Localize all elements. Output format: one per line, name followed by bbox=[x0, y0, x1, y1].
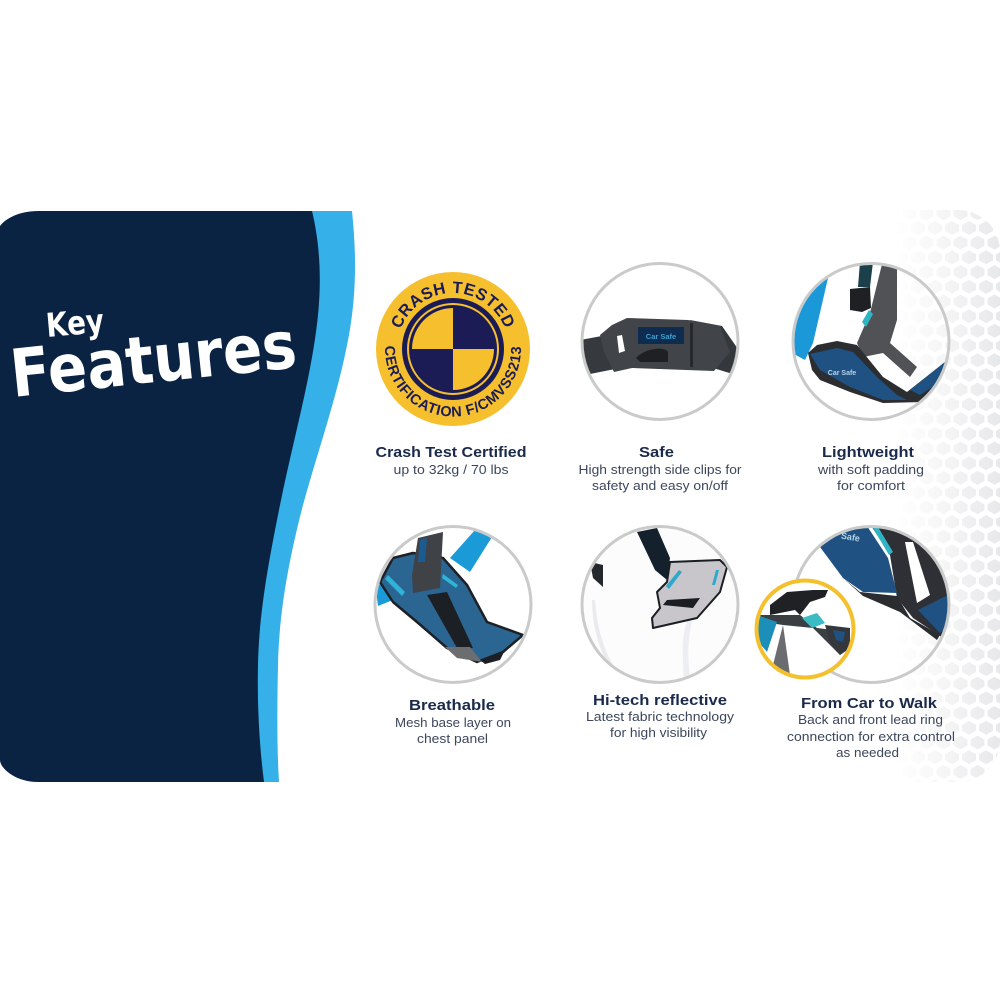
photo: harness padding: Car Safe bbox=[828, 370, 856, 377]
icon: crash tested badge bbox=[376, 272, 530, 426]
heading: Lightweight bbox=[822, 444, 914, 461]
title word: Key: Key bbox=[44, 301, 105, 345]
heading: Safe bbox=[639, 444, 674, 461]
description line 2: chest panel bbox=[417, 731, 488, 746]
photo: mesh chest panel bbox=[375, 526, 531, 682]
title: Key Features bbox=[7, 301, 300, 413]
feature: breathable bbox=[375, 526, 531, 746]
description: Mesh base layer on bbox=[395, 715, 511, 730]
description line 2: safety and easy on/off bbox=[592, 478, 728, 493]
description line 3: as needed bbox=[836, 745, 899, 760]
description: High strength side clips for bbox=[578, 462, 742, 477]
light blue wave stripe bbox=[240, 211, 355, 782]
description: Latest fabric technology bbox=[586, 709, 735, 724]
description line 2: for comfort bbox=[837, 478, 905, 493]
icon: crash tested badge: CRASH TESTED bbox=[392, 282, 514, 327]
photo: reflective fabric on dog bbox=[582, 526, 738, 683]
heading: Crash Test Certified bbox=[376, 444, 526, 461]
feature: lightweight bbox=[790, 260, 949, 493]
navy panel shape bbox=[0, 211, 320, 782]
title word: Features: Features bbox=[7, 306, 300, 413]
feature: safe bbox=[578, 264, 742, 493]
description: up to 32kg / 70 lbs bbox=[394, 462, 509, 477]
hexagon background texture bbox=[935, 210, 1000, 782]
photo: harness padding bbox=[790, 260, 949, 420]
heading: Breathable bbox=[409, 697, 495, 714]
photo: side clip buckle: Car Safe bbox=[646, 332, 676, 341]
description: with soft padding bbox=[817, 462, 924, 477]
heading: From Car to Walk bbox=[801, 695, 938, 712]
description: Back and front lead ring bbox=[798, 712, 943, 727]
icon: crash tested badge: CERTIFICATION F/CMVSS213 bbox=[384, 346, 522, 417]
feature: from car to walk bbox=[755, 524, 955, 760]
description line 2: connection for extra control bbox=[787, 729, 955, 744]
description line 2: for high visibility bbox=[610, 725, 708, 740]
photo: front of harness bbox=[793, 524, 950, 682]
inset photo: lead ring bbox=[755, 580, 854, 678]
heading: Hi-tech reflective bbox=[593, 692, 727, 709]
feature: hi-tech reflective bbox=[582, 526, 738, 740]
feature: crash test certified bbox=[376, 272, 530, 477]
panel: navy key features bbox=[0, 211, 355, 782]
photo: side clip buckle bbox=[580, 264, 740, 420]
photo: front of harness: Safe bbox=[840, 530, 861, 544]
